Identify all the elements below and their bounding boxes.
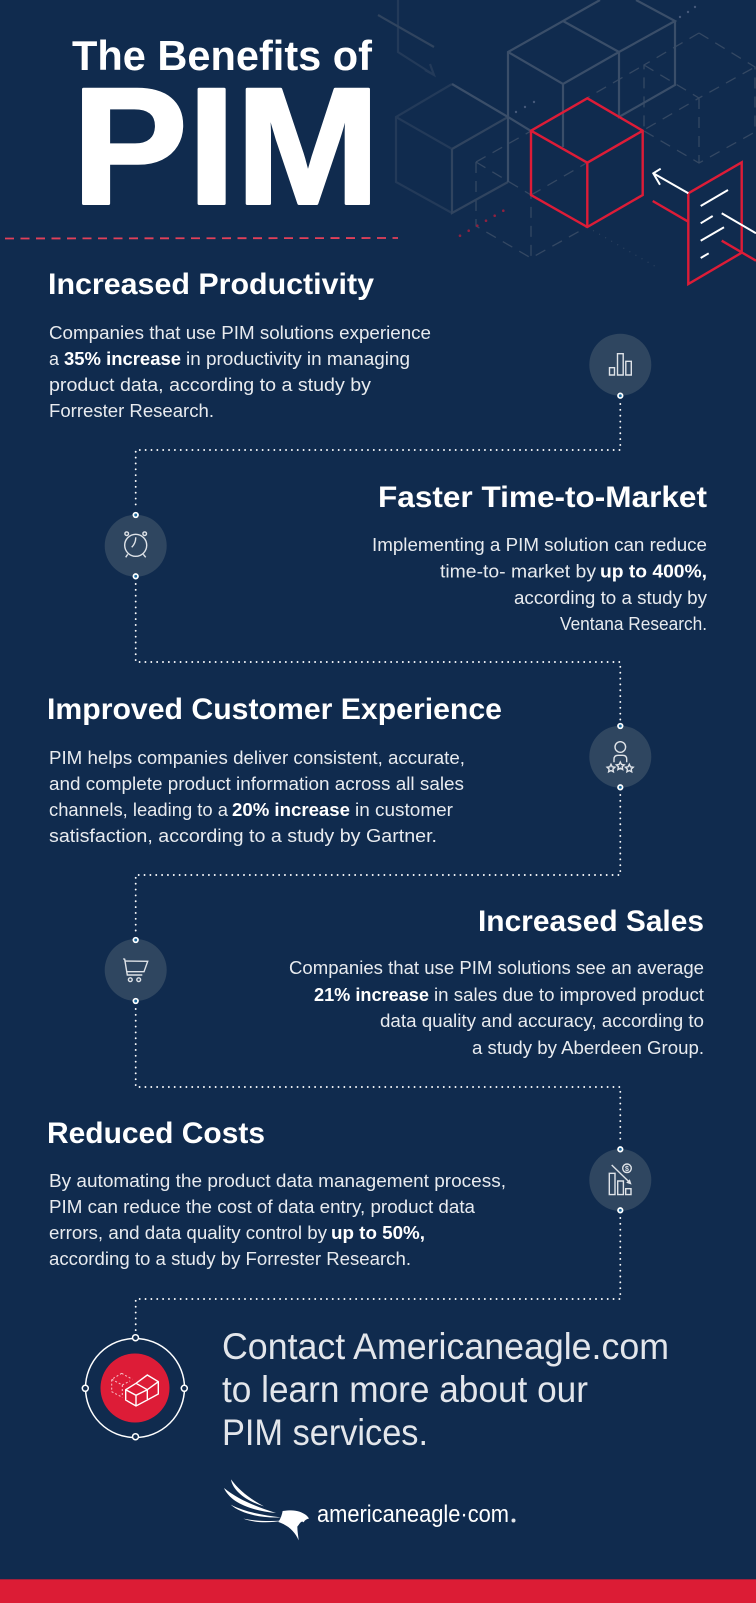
heading: Faster Time-to-Market — [378, 481, 707, 514]
section: Improved Customer Experience — [47, 693, 502, 846]
body text: satisfaction, according to a study by Gartner. — [49, 826, 437, 846]
section: Faster Time-to-Market — [372, 481, 707, 634]
body text: a — [49, 349, 60, 369]
body text: a study by Aberdeen Group. — [472, 1038, 704, 1058]
body text: By automating the product data management process, — [49, 1171, 506, 1191]
icon: falling bars with dollar: $ — [625, 1166, 629, 1173]
body text — [49, 323, 431, 421]
body text: Implementing a PIM solution can reduce — [372, 535, 707, 555]
body text: data quality and accuracy, according to — [380, 1011, 704, 1031]
body text: up to 400%, — [600, 562, 707, 582]
body text: PIM can reduce the cost of data entry, product data — [49, 1197, 476, 1217]
body text: Forrester Research. — [49, 401, 214, 421]
body text: errors, and data quality control by — [49, 1223, 327, 1243]
title: The Benefits of — [72, 32, 372, 79]
call to action: to learn more about our — [222, 1369, 588, 1410]
icon: shopping cart — [105, 938, 167, 1003]
call to action — [222, 1326, 669, 1453]
heading: Increased Sales — [478, 905, 704, 938]
heading: Reduced Costs — [47, 1117, 265, 1150]
body text — [49, 1171, 506, 1269]
call to action: PIM services. — [222, 1412, 428, 1453]
title: PIM — [72, 54, 380, 240]
body text: in customer — [355, 800, 453, 820]
footer bar — [0, 1579, 756, 1603]
icon: bar chart — [589, 334, 651, 398]
body text: according to a study by — [514, 588, 707, 608]
body text: according to a study by Forrester Research. — [49, 1249, 411, 1269]
header illustration: isometric cubes — [378, 0, 755, 268]
red cube — [531, 98, 643, 227]
icon: falling bars with dollar — [589, 1147, 651, 1213]
body text: in sales due to improved product — [434, 985, 704, 1005]
body text: 35% increase — [64, 349, 181, 369]
body text: in productivity in managing — [186, 349, 410, 369]
body text: 20% increase — [232, 800, 350, 820]
body text: Ventana Research. — [560, 614, 707, 634]
section: Increased Sales — [289, 905, 704, 1058]
body text: up to 50%, — [331, 1223, 425, 1243]
body text: 21% increase — [314, 985, 429, 1005]
logo: eagle and wordmark — [224, 1479, 516, 1540]
wordmark: americaneagle·com — [317, 1501, 509, 1528]
icon: eagle — [224, 1479, 309, 1540]
call to action: Contact Americaneagle.com — [222, 1326, 669, 1367]
heading: Increased Productivity — [48, 268, 374, 301]
icon: alarm clock — [105, 513, 167, 579]
section: Reduced Costs — [47, 1117, 506, 1269]
body text: product data, according to a study by — [49, 375, 371, 395]
body text: time-to- market by — [440, 562, 596, 582]
body text — [372, 535, 707, 634]
icon: boxes in ring — [82, 1335, 187, 1440]
body text: Companies that use PIM solutions experience — [49, 323, 431, 343]
body text: and complete product information across all sales — [49, 774, 464, 794]
body text — [49, 748, 465, 846]
document with arrow — [653, 162, 756, 284]
body text: PIM helps companies deliver consistent, accurate, — [49, 748, 465, 768]
body text — [289, 958, 704, 1058]
section: Increased Productivity — [48, 268, 431, 421]
dashed red divider — [5, 237, 398, 240]
icon: person with stars — [589, 724, 651, 790]
body text: Companies that use PIM solutions see an average — [289, 958, 704, 978]
body text: channels, leading to a — [49, 800, 229, 820]
heading: Improved Customer Experience — [47, 693, 502, 726]
dotted connector path — [136, 404, 620, 1331]
